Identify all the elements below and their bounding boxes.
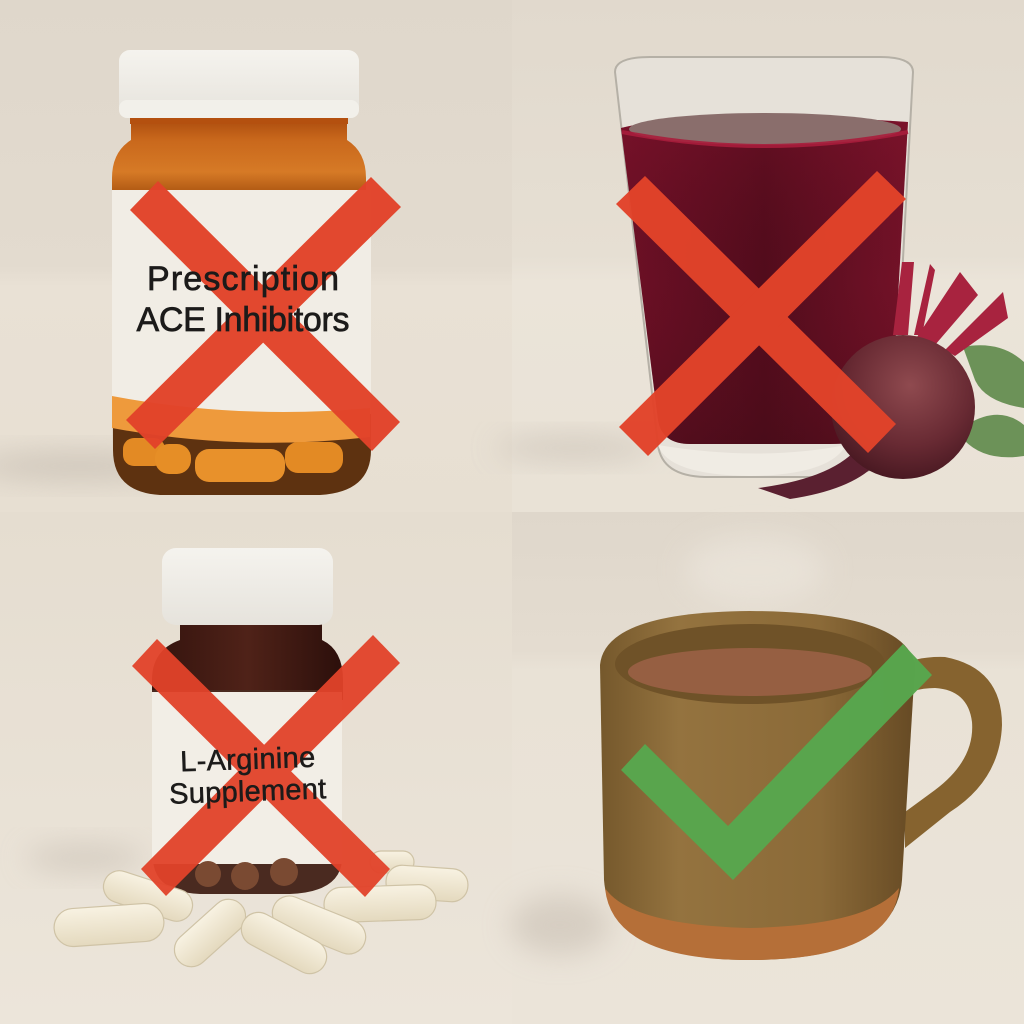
label: L-Arginine Supplement: Supplement [169, 773, 327, 811]
panel: coffee mug [510, 512, 1024, 1024]
icon: dark supplement bottle [152, 548, 343, 894]
label: L-Arginine Supplement: L-Arginine [180, 742, 316, 778]
label: Prescription ACE Inhibitors [136, 260, 350, 339]
label: L-Arginine Supplement [169, 742, 327, 811]
panel: beet juice [495, 0, 1024, 512]
icon: white cap [119, 50, 359, 118]
icon: amber pill bottle [112, 50, 371, 495]
panel: L-arginine supplement [0, 512, 512, 1024]
icon: ceramic mug [600, 611, 1002, 960]
icon: beetroot with leaves [758, 262, 1024, 499]
panel: prescription ACE inhibitors [0, 0, 512, 512]
icon: red cross [126, 177, 401, 451]
icon: green check mark [621, 644, 932, 880]
icon: scattered capsules [53, 851, 469, 980]
icon: white cap [162, 548, 333, 625]
label: Prescription ACE Inhibitors: ACE Inhibitors [136, 301, 350, 339]
icon: red cross [132, 635, 400, 897]
icon: red cross [616, 171, 906, 456]
decoration: steam [685, 535, 825, 605]
label: Prescription ACE Inhibitors: Prescription [147, 260, 339, 298]
icon: glass of beet juice [615, 57, 913, 477]
